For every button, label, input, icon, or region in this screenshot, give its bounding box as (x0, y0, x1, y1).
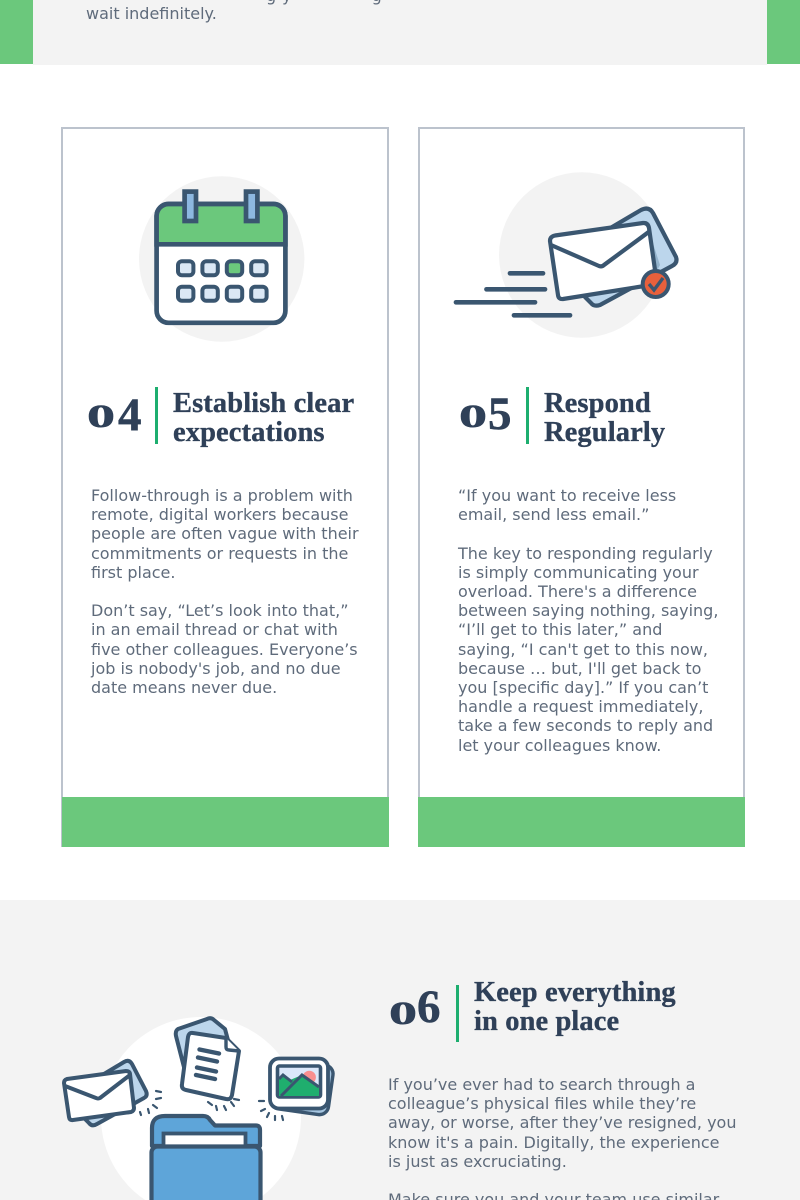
text: card 04 body: remote, digital workers because (91, 505, 348, 524)
text: section 06 body: If you’ve ever had to search through a (388, 1075, 695, 1094)
text: card 04 body: commitments or requests in the (91, 544, 348, 563)
text: card 05 body: because … but, I'll get back to (458, 659, 701, 678)
text: card 05 body: handle a request immediately, (458, 697, 703, 716)
heading: keep everything in one place: in one place (474, 1006, 619, 1037)
heading: 05 number (459, 388, 512, 440)
text: card 05 body: “If you want to receive less (458, 486, 676, 505)
heading: 04 number: 0 (87, 399, 115, 435)
heading: keep everything in one place (474, 977, 676, 1037)
text: card 05 body: overload. There's a difference (458, 582, 697, 601)
text: section 06 body: know it's a pain. Digitally, the experience (388, 1133, 720, 1152)
panel: card 05 (418, 127, 745, 847)
heading: respond regularly: Respond (544, 388, 651, 419)
text: card 05 body: “I’ll get to this later,” and (458, 620, 662, 639)
card footer (418, 797, 745, 847)
heading: respond regularly (544, 388, 665, 448)
text: card 05 body: you [specific day].” If you can’t (458, 678, 708, 697)
text: card 05 body (458, 486, 718, 755)
text: section 06 body (388, 1075, 736, 1200)
panel: top section remainder (0, 0, 800, 65)
heading: 04 number (87, 389, 142, 441)
heading divider 04 (155, 387, 158, 444)
right green edge (767, 0, 800, 64)
text: section 06 body: colleague’s physical files while they’re (388, 1094, 696, 1113)
card footer (62, 797, 389, 847)
text: card 04 body: Follow-through is a problem with (91, 486, 353, 505)
text: card 04 body: in an email thread or chat with (91, 620, 338, 639)
heading: respond regularly: Regularly (544, 417, 665, 448)
heading: 06 number: 6 (417, 981, 440, 1033)
text: card 05 body: take a few seconds to reply and (458, 716, 713, 735)
text: card 05 body: The key to responding regularly (458, 544, 713, 563)
heading: 05 number: 5 (488, 388, 512, 440)
panel: section 06 background (0, 900, 800, 1200)
heading: 06 number (389, 981, 440, 1033)
heading: 06 number: 0 (389, 996, 417, 1032)
text: card 05 body: is simply communicating your (458, 563, 699, 582)
text: card 04 body: date means never due. (91, 678, 277, 697)
text: card 04 body: five other colleagues. Everyone’s (91, 640, 358, 659)
heading: 04 number: 4 (118, 389, 142, 441)
text: card 05 body: let your colleagues know. (458, 736, 661, 755)
text: section 06 body: away, or worse, after they’ve resigned, you (388, 1113, 736, 1132)
card border (418, 127, 745, 847)
text: section 06 body: is just as excruciating. (388, 1152, 567, 1171)
heading: establish clear expectations: Establish clear (173, 388, 354, 419)
text: card 05 body: between saying nothing, saying, (458, 601, 718, 620)
heading: 05 number: 0 (459, 399, 487, 435)
text: card 04 body: people are often vague with their (91, 524, 359, 543)
text: card 04 body: Don’t say, “Let’s look into that,” (91, 601, 349, 620)
heading: keep everything in one place: Keep everything (474, 977, 676, 1008)
heading divider 05 (526, 387, 529, 444)
left green edge (0, 0, 33, 64)
heading: establish clear expectations: expectations (173, 417, 325, 448)
heading divider 06 (456, 985, 459, 1042)
text: card 04 body (90, 486, 359, 697)
panel: card 04 (61, 127, 389, 847)
text: card 05 body: saying, “I can't get to this now, (458, 640, 708, 659)
text: card 05 body: email, send less email.” (458, 505, 649, 524)
grey panel (33, 0, 767, 65)
text: card 04 body: job is nobody's job, and no due (91, 659, 341, 678)
closing text: wait indefinitely. (86, 4, 217, 23)
card border (61, 127, 389, 847)
text: card 04 body: first place. (91, 563, 175, 582)
heading: establish clear expectations (173, 388, 354, 448)
